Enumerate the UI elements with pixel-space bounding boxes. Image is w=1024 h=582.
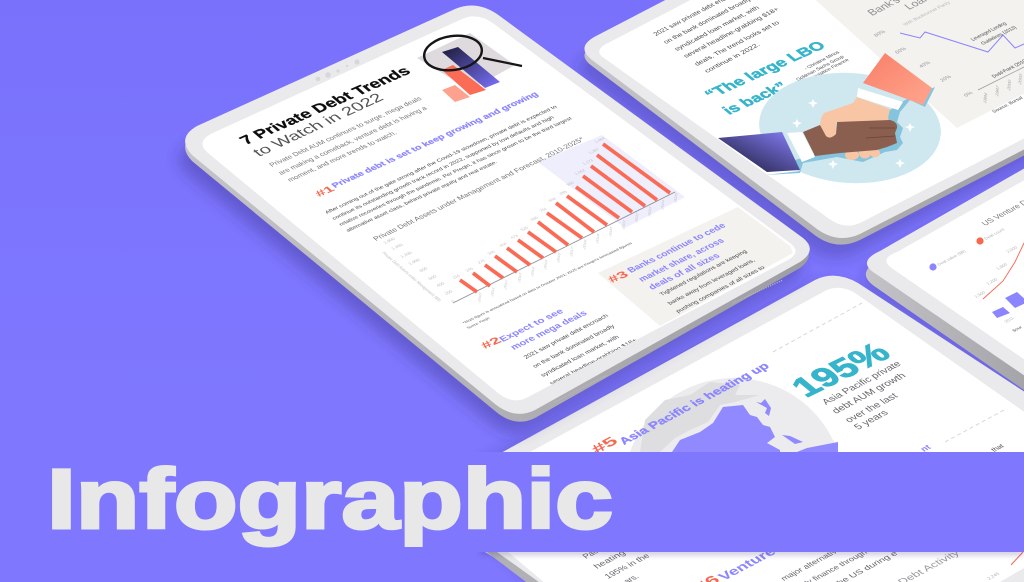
gray panel: bank loan chart: Source: Bursal xyxy=(991,96,1024,114)
chart year labels: 2012 xyxy=(503,278,508,291)
quote attribution: Goldman Sachs Group xyxy=(795,54,846,82)
quote body text: several headline-grabbing $18+ xyxy=(682,6,781,59)
intro text: Private Debt AUM continues to surge, mega deals xyxy=(268,96,424,168)
quote attribution: Global Head of Acquisition Finance xyxy=(775,58,851,98)
chart value labels: 848 xyxy=(547,196,558,203)
section #1 heading: #1 xyxy=(312,184,338,199)
chart y axis labels: 0 xyxy=(450,299,457,304)
chart value labels: 1,173 xyxy=(581,158,595,166)
chart y axis labels: 400 xyxy=(435,281,446,288)
chart legend: Deal value ($B) xyxy=(936,249,967,267)
gray panel: bank loan chart: 20% xyxy=(939,74,953,83)
chart y axis labels: 800 xyxy=(418,266,429,273)
title: 7 Private Debt Trends xyxy=(236,64,415,148)
section #2: 2021 saw private debt encroach xyxy=(522,313,610,360)
tablet: bottom, Asia Pacific xyxy=(434,276,1024,582)
gray panel: bank loan chart: 0% xyxy=(963,91,975,98)
panel: section #3: pushing companies of all sizes to xyxy=(675,265,767,314)
section #2: more mega deals xyxy=(508,309,589,351)
text below band, right column: major alternative xyxy=(779,545,844,582)
tablet: main, private debt trends xyxy=(179,5,810,434)
panel: section #3: Tightened regulations are keeping xyxy=(659,249,749,297)
bars and line chart xyxy=(973,243,1024,333)
panel: section #3: Banks continue to cede xyxy=(625,221,728,274)
chart year labels: 2018 xyxy=(582,238,587,251)
chart year labels xyxy=(477,191,678,304)
gray panel: bank loan chart: 60% xyxy=(894,46,908,55)
intro text: moment, and more trends to watch. xyxy=(286,130,399,183)
chart value labels: 1,287 xyxy=(587,147,601,155)
section #2: deals. The trend looks set to xyxy=(557,350,641,395)
chart fragment below band xyxy=(986,552,1024,582)
quote heading xyxy=(701,39,830,118)
chart value labels: 526 xyxy=(519,225,530,232)
chart value labels: 404 xyxy=(498,241,509,248)
gray panel: bank loan chart: With Bookrunner Parity xyxy=(902,0,953,27)
panel: section #3: #3 xyxy=(605,269,632,285)
dashed divider xyxy=(773,303,862,352)
chart year labels: 2022 xyxy=(634,211,639,224)
text below band, left column: heating xyxy=(591,548,628,570)
gray panel: bank loan chart: 40% xyxy=(918,60,932,69)
section #1 body xyxy=(324,105,574,233)
chart footnote: *2020 figure is annualized based on data to October 2021; 2025 are Preqin's forecasted figures xyxy=(462,242,633,325)
chart legend: Deal count xyxy=(983,227,1006,241)
bars and line chart: 1,800 xyxy=(995,262,1009,271)
chart year labels: 2019 xyxy=(595,232,600,245)
chart year labels: 2015 xyxy=(543,258,548,271)
bars and line chart: 2,000 xyxy=(1005,245,1019,254)
section #2 xyxy=(482,310,636,384)
chart year labels: 2023 xyxy=(647,205,652,218)
banner title: Infographic xyxy=(47,452,613,546)
chart year labels: 2017 xyxy=(569,245,574,258)
panel: section #3: market share, across xyxy=(636,236,726,283)
section #1 body: relative recoveries through the pandemic. Per Preqin, it has since grown to be the third largest xyxy=(338,116,574,227)
chart y axis labels: 1,400 xyxy=(390,243,405,251)
quote body text: deals. The trend looks set to xyxy=(693,20,782,67)
panel: section #3: private debt as an alternative xyxy=(684,279,763,321)
gray panel: bank loan chart: 80% xyxy=(873,29,887,38)
quote body text: syndicated loan market, with xyxy=(673,5,762,52)
chart value labels: 345 xyxy=(486,249,497,256)
bars and line chart: 1,200 xyxy=(985,277,999,286)
title: to Watch in 2022 xyxy=(249,91,388,160)
chart value labels: 245 xyxy=(464,266,475,273)
chart year labels: 2011 xyxy=(490,285,495,298)
stat description: 5 years xyxy=(852,408,891,432)
chart fragment below band: 2,245 xyxy=(986,571,1002,581)
chart value labels xyxy=(451,136,607,280)
chart value labels: 960 xyxy=(565,180,576,187)
quote body text: continue in 2022. xyxy=(703,42,762,74)
gray panel: bank loan chart: Guidelines (2013) xyxy=(980,25,1018,46)
section #2: syndicated loan market, with xyxy=(539,334,621,378)
stat description: Asia Pacific private xyxy=(820,359,904,407)
text below band, left column: 195% in the xyxy=(602,551,652,580)
gray panel: bank loan chart: 2000 xyxy=(1007,78,1012,92)
chart value labels: 761 xyxy=(538,206,549,213)
camera dots xyxy=(316,59,360,81)
stat description xyxy=(823,362,906,430)
section #1 body: alternative asset class, behind private equity and real estate. xyxy=(345,160,500,233)
chart footnote: Source: Preqin xyxy=(466,317,491,330)
heading: #5: #5 xyxy=(588,435,622,457)
quote body text xyxy=(652,0,782,74)
stat: 195%: 195% xyxy=(784,338,898,403)
gray panel: bank loan chart: 1997 xyxy=(995,84,1000,98)
tablet: right, venture debt chart xyxy=(862,168,1024,392)
quote heading: “The large LBO xyxy=(701,39,830,102)
panel: section #3 xyxy=(598,207,793,326)
illustration: handshake xyxy=(718,53,945,189)
quote attribution: - Christine Minos xyxy=(803,50,842,71)
chart value labels: 216 xyxy=(451,273,462,280)
chart: private debt assets bar chart: Private Debt Assets under Management and Forecast, 2010-2025* xyxy=(371,136,586,242)
text fragments above band: that xyxy=(990,443,1006,453)
stat description: debt AUM growth xyxy=(830,371,909,416)
chart year labels: 2010 xyxy=(477,291,482,304)
section #2: on the bank dominated broadly xyxy=(531,323,618,369)
chart y axis labels: 1,200 xyxy=(399,251,414,259)
tablet: top right, handshake quote xyxy=(578,0,1024,258)
panel: section #3: banks away from leveraged loans, xyxy=(667,258,757,306)
heading: #5: Asia Pacific is heating up xyxy=(616,360,772,447)
chart value labels: 1,464 xyxy=(593,136,607,144)
text fragments above band: nt xyxy=(918,443,933,453)
heading: #6: Venture xyxy=(715,545,779,582)
chart year labels: 2013 xyxy=(517,271,522,284)
section #2: several headline-grabbing $18+ xyxy=(548,337,639,386)
illustration: globe xyxy=(630,378,838,452)
text below band, left column: Pacific xyxy=(580,542,610,560)
gray panel: bank loan chart: Leveraged Lending xyxy=(970,21,1008,42)
chart year labels: 2021 xyxy=(621,218,626,231)
chart year labels: 2024 xyxy=(660,198,665,211)
section #2: #2 xyxy=(478,335,505,351)
panel: section #3: deals of all sizes xyxy=(646,251,722,291)
gray panel: bank loan chart: 1994 xyxy=(983,91,988,105)
text below band, right column xyxy=(782,552,897,582)
chart value labels: 1,062 xyxy=(573,168,587,176)
icon: magnifier over bar chart xyxy=(417,32,522,102)
speaker grilles xyxy=(555,280,783,402)
stat description: over the last xyxy=(843,392,901,425)
chart value labels: 276 xyxy=(476,258,487,265)
section #1 body: After coming out of the gate strong after the Covid-19 slowdown, private debt is expected to xyxy=(324,105,559,215)
gray panel: bank loan chart: 2003 xyxy=(1018,72,1023,86)
chart year labels: 2016 xyxy=(556,251,561,264)
chart y axis labels xyxy=(382,237,457,304)
chart footnote xyxy=(462,242,633,330)
chart y axis labels: 600 xyxy=(427,274,438,281)
bars and line chart: 1,500 xyxy=(973,290,987,299)
chart year labels: 2014 xyxy=(530,265,535,278)
heading: #5 xyxy=(592,364,768,452)
section #1 heading: Private debt is set to keep growing and growing xyxy=(329,90,540,189)
chart value labels: 473 xyxy=(509,233,520,240)
text fragments above band xyxy=(921,444,1004,452)
chart y axis labels: 1,600 xyxy=(382,237,397,245)
bars and line chart: 2011 xyxy=(1003,316,1016,324)
chart y axis labels: 200 xyxy=(443,289,454,296)
text below band, left column xyxy=(582,552,649,582)
intro text: are making a comeback, venture debt is having a xyxy=(277,106,429,176)
gray panel: bank loan chart xyxy=(810,0,1024,128)
chart y axis labels: 1,000 xyxy=(407,258,422,266)
bars and line chart: Sour xyxy=(1011,325,1024,333)
chart year labels: 2025 xyxy=(673,191,678,204)
chart legend xyxy=(929,227,1006,271)
quote body text: on the bank dominated broadly xyxy=(662,0,754,45)
section #1 heading xyxy=(312,90,540,199)
chart value labels: 895 xyxy=(558,189,569,196)
chart: private debt assets bar chart: Private Debt Assets under Management ($B) xyxy=(381,251,443,303)
quote heading: is back” xyxy=(719,80,792,118)
chart value labels: 596 xyxy=(529,215,540,222)
section #1 body: continue its outstanding growth track record in 2022, supported by low defaults and high xyxy=(331,115,556,221)
chart year labels: 2020 xyxy=(608,225,613,238)
chart: private debt assets bar chart xyxy=(371,135,685,304)
banner band xyxy=(0,452,1024,555)
section #2: Expect to see xyxy=(497,307,566,343)
